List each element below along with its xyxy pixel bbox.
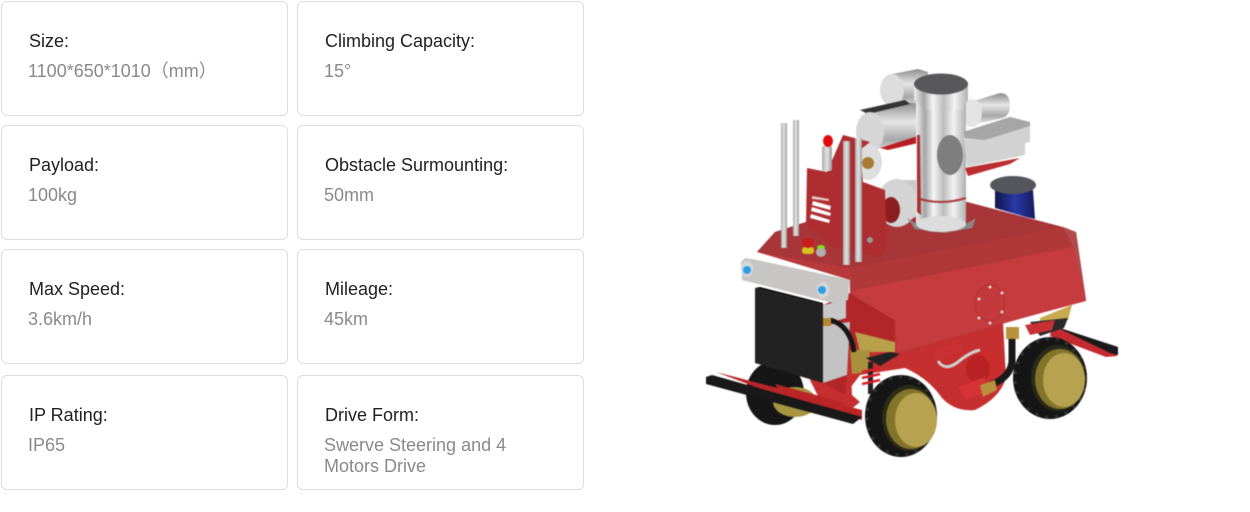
red beacon xyxy=(822,135,833,171)
emergency stop and indicator buttons xyxy=(802,238,826,257)
card: drive form: Motors Drive xyxy=(324,456,426,476)
hose and brass fitting xyxy=(980,327,1019,397)
card: drive form: Drive Form: xyxy=(325,405,419,425)
middle left camera xyxy=(856,100,920,152)
red control plate xyxy=(806,135,887,257)
front mechanical bay xyxy=(818,293,900,395)
lower chassis hull xyxy=(810,305,1072,410)
front bumper xyxy=(706,372,862,424)
front wheel xyxy=(865,375,937,457)
rear bumper xyxy=(1050,326,1118,357)
central steel column xyxy=(907,74,976,233)
card: mileage: 45km xyxy=(324,309,368,329)
card: payload xyxy=(1,125,288,240)
card: payload: Payload: xyxy=(29,155,99,175)
card: obstacle surmounting xyxy=(297,125,584,240)
card: max speed: 3.6km/h xyxy=(28,309,92,329)
right wheel xyxy=(1013,337,1087,419)
card: max speed xyxy=(1,249,288,364)
card: mileage xyxy=(297,249,584,364)
card: size: 1100*650*1010（mm） xyxy=(28,61,217,81)
card: drive form xyxy=(297,375,584,490)
card: IP rating xyxy=(1,375,288,490)
upper left camera xyxy=(880,69,928,106)
black control box xyxy=(755,287,823,383)
card: climbing capacity: 15° xyxy=(324,61,351,81)
card: size: Size: xyxy=(29,31,69,51)
card: size xyxy=(1,1,288,116)
hatch disc xyxy=(975,285,1005,324)
rear camera cylinder xyxy=(962,93,1010,127)
card: obstacle surmounting: Obstacle Surmounting: xyxy=(325,155,508,175)
rear mast bracket steel xyxy=(854,144,920,227)
front right camera xyxy=(937,117,1030,176)
card: mileage: Mileage: xyxy=(325,279,393,299)
card: drive form: Swerve Steering and 4 xyxy=(324,435,506,455)
spec grid xyxy=(1,1,584,490)
rear left wheel xyxy=(746,361,817,425)
silver control bar xyxy=(741,258,850,303)
antenna rods xyxy=(781,120,862,265)
lidar sensor xyxy=(990,176,1036,219)
card: climbing capacity: Climbing Capacity: xyxy=(325,31,475,51)
card: payload: 100kg xyxy=(28,185,77,205)
card: IP rating: IP Rating: xyxy=(29,405,108,425)
card: climbing capacity xyxy=(297,1,584,116)
suspension spring xyxy=(862,362,880,394)
card: max speed: Max Speed: xyxy=(29,279,125,299)
main red body xyxy=(757,202,1086,353)
card: obstacle surmounting: 50mm xyxy=(324,185,374,205)
card: IP rating: IP65 xyxy=(28,435,65,455)
